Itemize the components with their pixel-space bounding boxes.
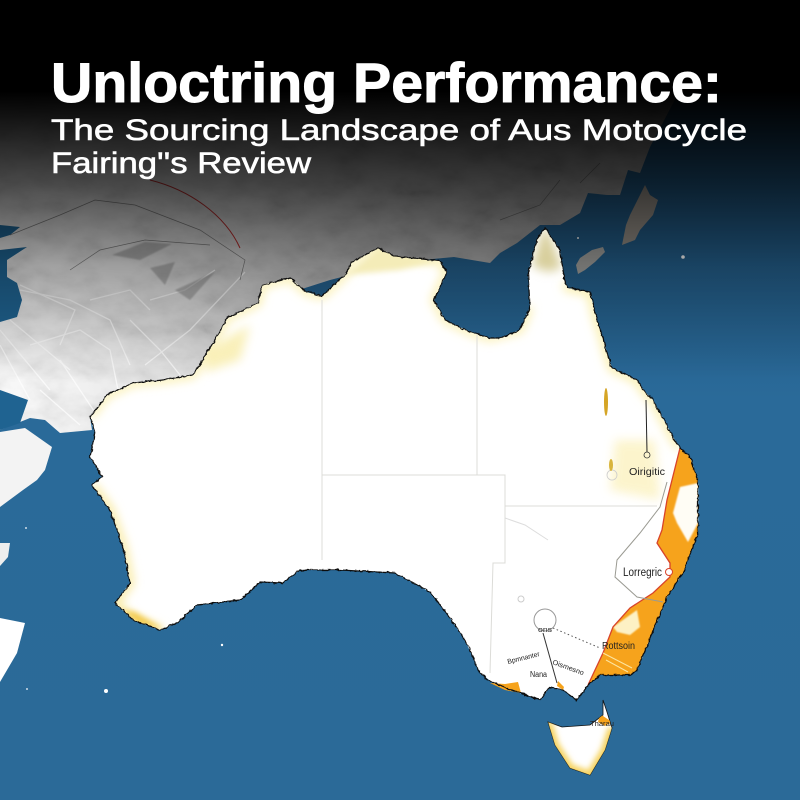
north-west inland tint bbox=[205, 325, 250, 372]
coastline bbox=[90, 228, 698, 700]
subtitle: The Sourcing Landscape of Aus Motocycle bbox=[51, 114, 747, 147]
orange region: NSW coast bbox=[588, 448, 698, 685]
north-coast tint bbox=[345, 248, 440, 275]
map: Asian land mass bbox=[0, 0, 720, 433]
map labels: Oismesno bbox=[551, 659, 585, 677]
red route line bbox=[150, 180, 240, 248]
state borders bbox=[322, 300, 657, 673]
map labels: Lorregric bbox=[623, 567, 662, 579]
map labels: Oirigitic bbox=[629, 467, 665, 478]
land texture bbox=[0, 270, 245, 425]
map labels: ons bbox=[538, 627, 553, 634]
map labels: Rottsoin bbox=[602, 641, 635, 652]
Cape York tint bbox=[532, 222, 562, 272]
lakes bbox=[0, 225, 28, 430]
map labels: Tharau bbox=[590, 721, 614, 728]
land mottling bbox=[0, 0, 720, 433]
map labels: Nana bbox=[530, 670, 547, 679]
map labels bbox=[507, 467, 665, 728]
title block bbox=[51, 51, 747, 180]
map: islands bbox=[0, 185, 685, 693]
map annotations bbox=[505, 388, 667, 728]
orange patch: south coast bbox=[490, 682, 521, 693]
map: Australia mainland bbox=[90, 222, 698, 700]
subtitle bbox=[51, 114, 747, 180]
subtitle: Fairing''s Review bbox=[51, 147, 311, 180]
title: Unloctring Performance: bbox=[51, 51, 722, 114]
top dark gradient overlay bbox=[0, 0, 800, 380]
map labels: Bpmnanter bbox=[507, 651, 541, 666]
dark patches bbox=[112, 242, 215, 300]
map: Tasmania bbox=[548, 700, 612, 775]
